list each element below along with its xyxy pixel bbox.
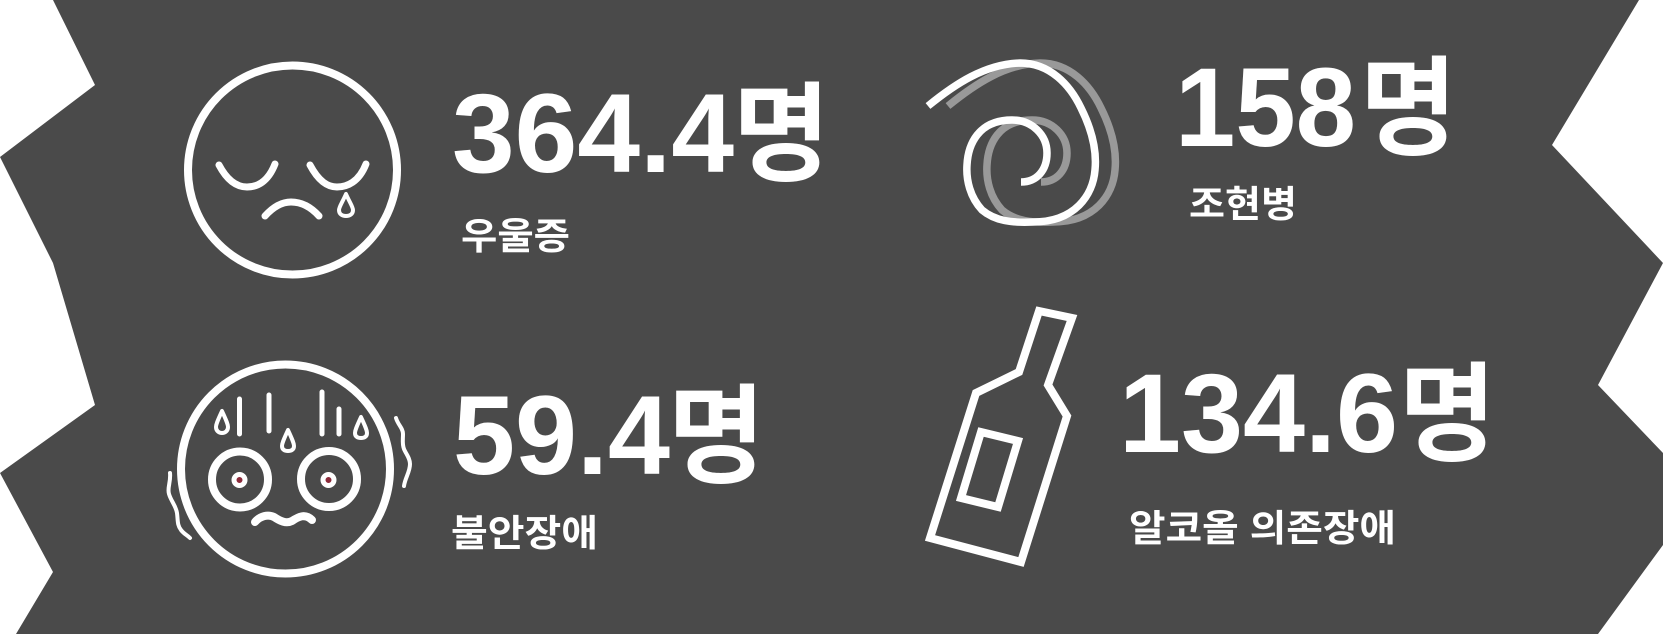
stat: alcohol dependence count: 134.6 [1119,351,1398,476]
stat: anxiety disorder count: 59.4 [453,373,670,498]
label: alcohol dependence: 알코올 의존장애 [1129,508,1396,549]
label: anxiety disorder: 불안장애 [451,513,598,554]
stat: anxiety disorder count: 명 [668,376,765,497]
label: depression: 우울증 [461,216,570,257]
stat: depression count: 명 [733,74,830,195]
icon: bottle [930,311,1072,562]
stat: alcohol dependence count: 명 [1399,354,1496,475]
stat: depression count: 364.4 [452,71,734,196]
stat: panic disorder count [1175,45,1457,170]
label: panic disorder: 조현병 [1189,184,1297,225]
stat: panic disorder count: 158 [1175,45,1356,170]
icon: anxious face [168,364,410,574]
stat: panic disorder count: 명 [1360,48,1457,169]
icon: sad face [188,66,397,274]
stat: anxiety disorder count [453,373,765,498]
icon: spiral [928,63,1115,222]
